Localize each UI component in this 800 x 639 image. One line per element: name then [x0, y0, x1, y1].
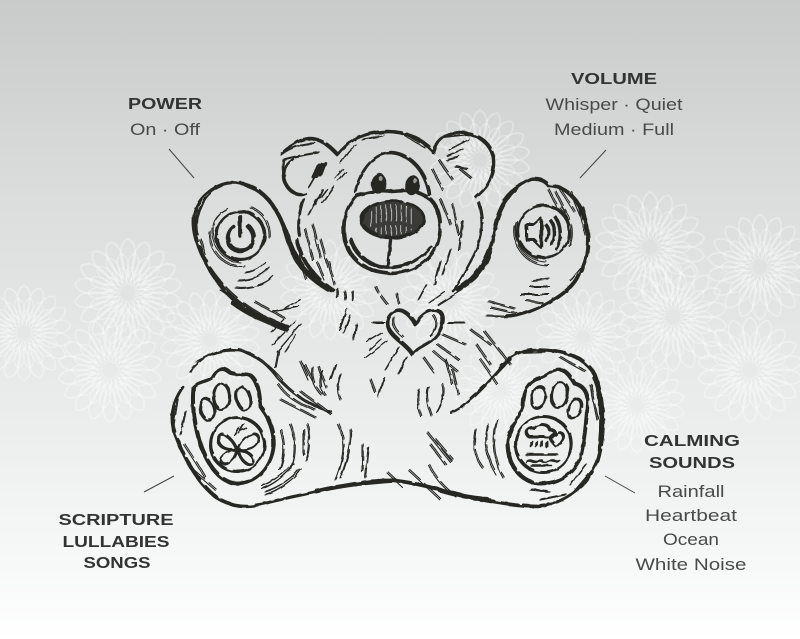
label: volume: VOLUME — [571, 71, 657, 88]
label: calming sounds: Heartbeat — [645, 506, 737, 525]
eyes — [372, 175, 418, 195]
label: power: POWER — [128, 96, 202, 113]
right paw pad with rain cloud, heart and waves icon — [507, 370, 587, 484]
label: scripture lullabies songs: SCRIPTURE — [58, 512, 174, 529]
label: power: On · Off — [130, 120, 200, 139]
volume button icon — [514, 206, 571, 266]
philtrum — [387, 240, 390, 268]
body fur marks — [262, 318, 510, 500]
head and ears — [281, 132, 493, 300]
bear illustration — [172, 131, 604, 507]
label: calming sounds: SOUNDS — [649, 455, 735, 472]
power button icon — [209, 208, 269, 267]
muzzle and face — [343, 153, 440, 274]
label: power — [128, 96, 202, 178]
label: calming sounds: Rainfall — [658, 482, 724, 501]
label: volume — [546, 71, 683, 178]
left paw pad with butterfly icon — [192, 370, 273, 484]
label: calming sounds — [605, 433, 746, 574]
butterfly icon — [218, 425, 258, 465]
label: calming sounds: CALMING — [644, 433, 740, 450]
right arm with volume button — [453, 180, 588, 317]
left arm with power button — [193, 183, 331, 331]
label: scripture lullabies songs: SONGS — [84, 555, 150, 572]
background flower pattern — [0, 110, 800, 452]
left foot outline — [172, 350, 394, 506]
label: volume: Whisper · Quiet — [546, 95, 683, 114]
weather icon — [526, 425, 563, 466]
label: calming sounds: Ocean — [663, 530, 719, 549]
label: volume: Medium · Full — [554, 120, 674, 139]
heart — [339, 285, 465, 374]
label: calming sounds: White Noise — [636, 555, 746, 574]
right foot outline — [394, 350, 602, 507]
label: scripture lullabies songs — [58, 476, 174, 572]
nose — [361, 202, 423, 238]
label: scripture lullabies songs: LULLABIES — [62, 534, 170, 551]
